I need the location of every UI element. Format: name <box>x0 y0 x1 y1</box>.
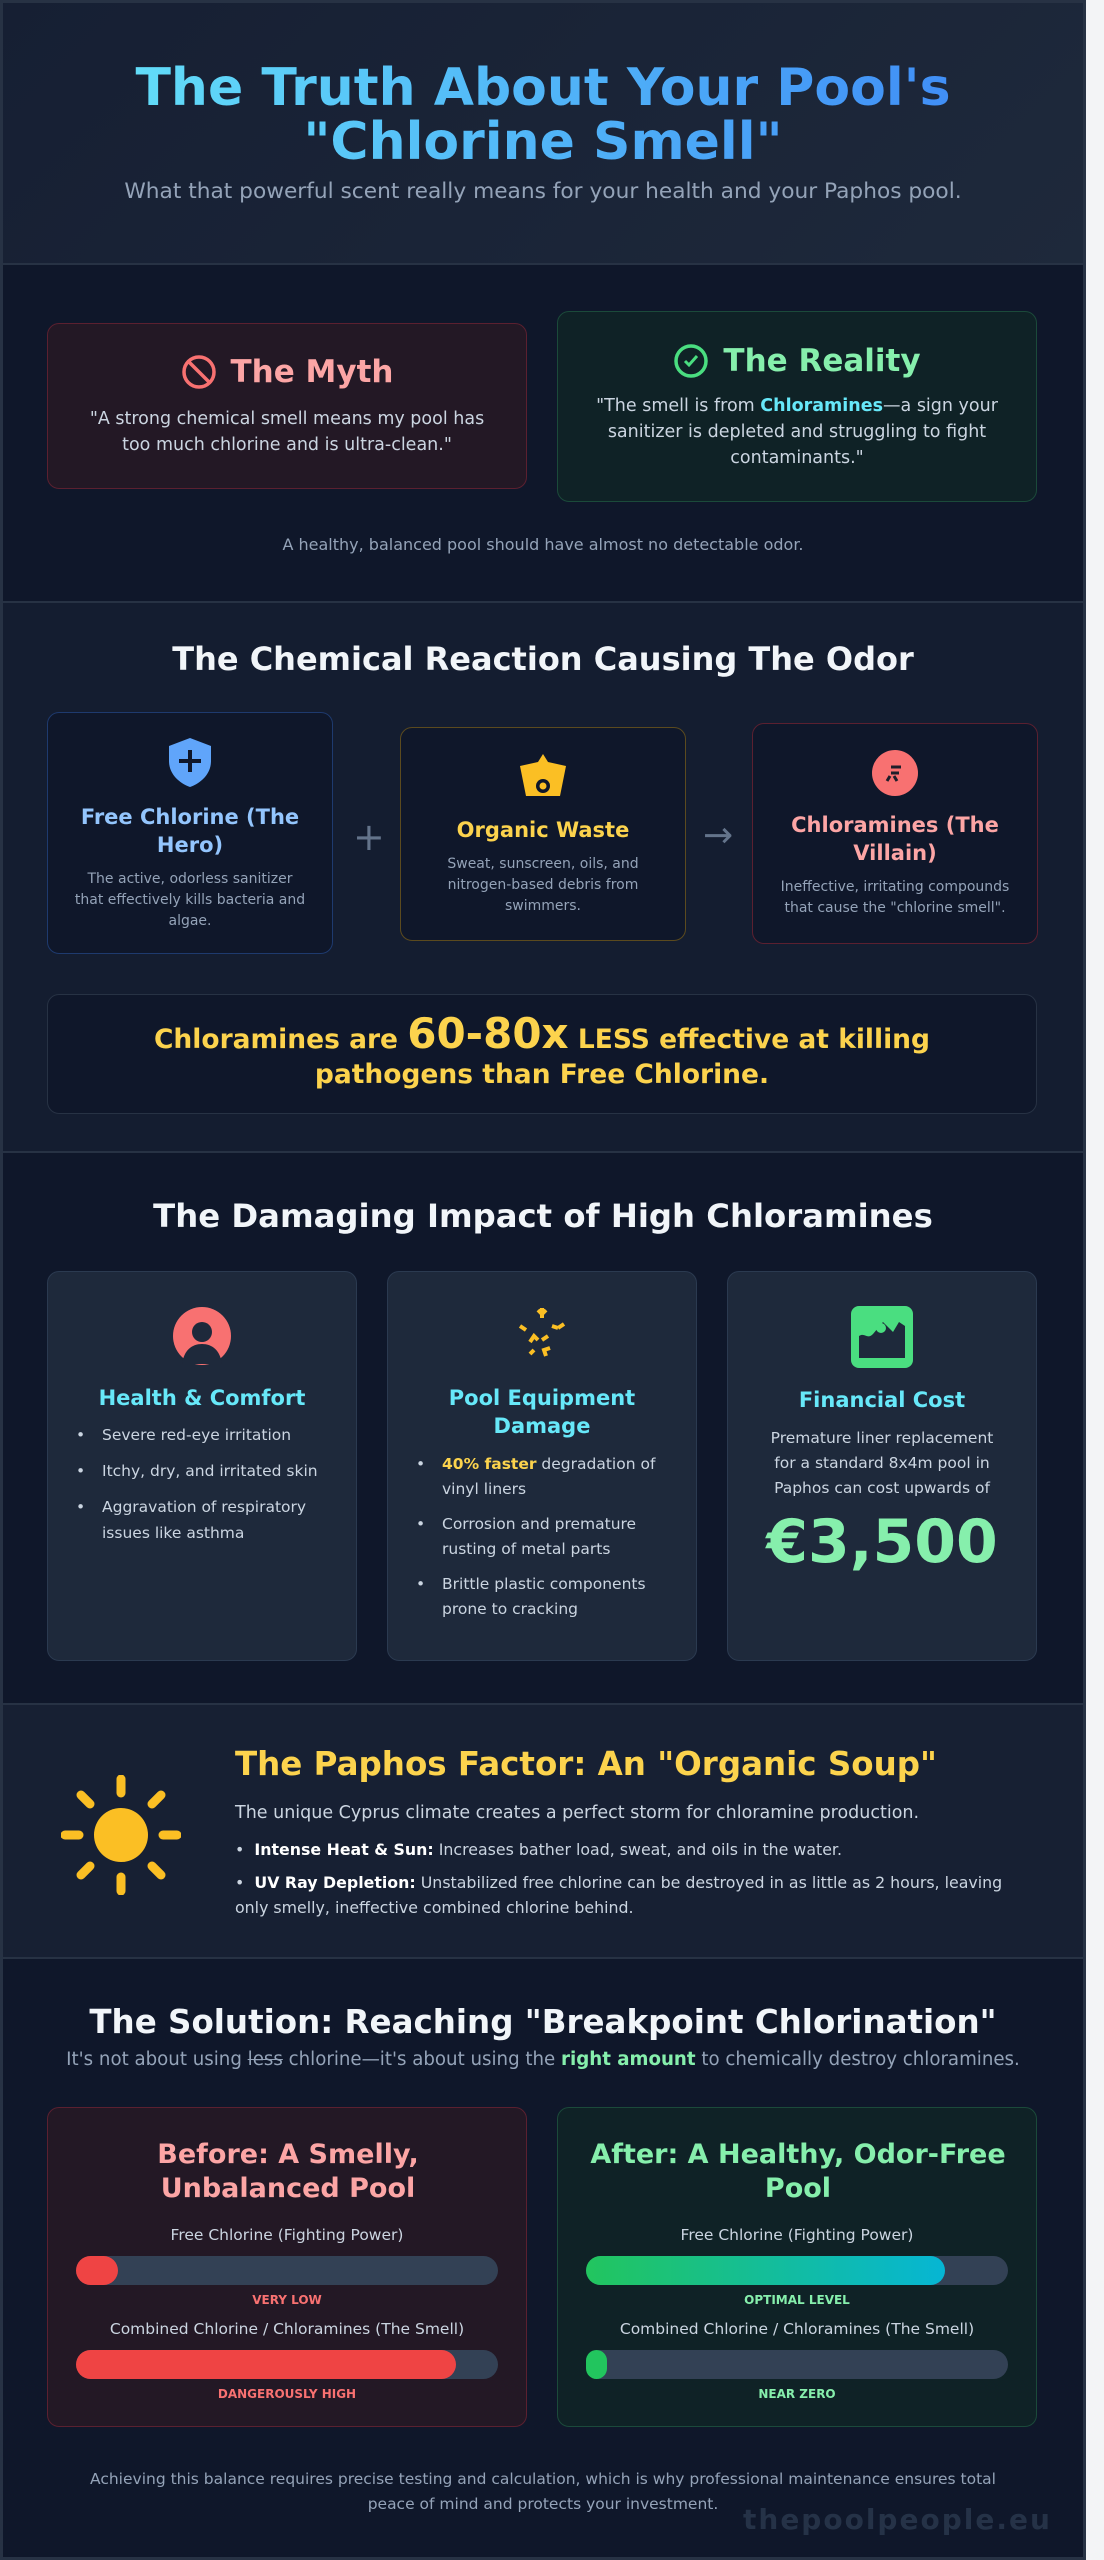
myth text: "A strong chemical smell means my pool has <box>90 409 484 429</box>
bar: free chlorine low: VERY LOW <box>252 2293 322 2307</box>
card: health: Itchy, dry, and irritated skin <box>102 1462 318 1480</box>
card: health <box>47 1271 357 1661</box>
card: financial: Paphos can cost upwards of <box>774 1479 990 1497</box>
callout: 60-80x: pathogens than Free Chlorine. <box>315 1059 769 1090</box>
bar: free chlorine low: Free Chlorine (Fighting Power) <box>171 2226 403 2244</box>
card: financial: Financial Cost <box>799 1388 965 1412</box>
myth heading: The Myth <box>230 354 393 390</box>
card: chloramines: that cause the "chlorine smell". <box>784 900 1006 916</box>
icon: shield <box>169 738 211 787</box>
heading: The Chemical Reaction Causing The Odor <box>172 640 914 678</box>
bar: free chlorine low <box>76 2226 498 2307</box>
text block: Paphos factor: • Intense Heat & Sun: Increases bather load, sweat, and oils in the water. <box>235 1840 842 1859</box>
text block: Paphos factor: The Paphos Factor: An "Organic Soup" <box>235 1745 937 1783</box>
card: financial: for a standard 8x4m pool in <box>774 1454 990 1472</box>
section: damaging impact <box>3 1153 1083 1705</box>
card: free chlorine: algae. <box>168 912 212 928</box>
reality text: sanitizer is depleted and struggling to fight <box>608 422 986 442</box>
card: free chlorine: Hero) <box>157 832 223 856</box>
icon: plus: + <box>353 815 385 859</box>
bar: free chlorine optimal: OPTIMAL LEVEL <box>744 2293 850 2307</box>
card: chloramines: Ineffective, irritating compounds <box>781 878 1009 894</box>
panel: after: After: A Healthy, Odor-Free <box>590 2139 1006 2170</box>
bar: chloramines high <box>76 2320 498 2401</box>
footer text <box>90 2470 996 2513</box>
myth text: too much chlorine and is ultra-clean." <box>122 435 452 455</box>
card: equipment: Damage <box>494 1414 590 1438</box>
reality text <box>596 396 998 468</box>
card: free chlorine: that effectively kills bacteria and <box>75 892 305 908</box>
bar: chloramines near zero <box>586 2320 1008 2401</box>
card: organic waste <box>400 727 686 941</box>
footer text: Achieving this balance requires precise testing and calculation, which is why professional maintenance ensures total <box>90 2470 996 2488</box>
card: health: Severe red-eye irritation <box>102 1426 291 1444</box>
card: equipment: Pool Equipment <box>449 1386 635 1410</box>
heading: The Solution: Reaching "Breakpoint Chlorination" <box>89 2003 997 2041</box>
card: organic waste: Sweat, sunscreen, oils, and <box>447 856 639 872</box>
card: equipment <box>387 1271 697 1661</box>
panel: before: Unbalanced Pool <box>161 2173 415 2204</box>
section: solution <box>3 1959 1083 2560</box>
icon: sun <box>61 1775 181 1895</box>
text block: Paphos factor <box>234 1745 1002 1917</box>
icon: villain <box>872 750 918 796</box>
bar: chloramines high: Combined Chlorine / Chloramines (The Smell) <box>110 2320 464 2338</box>
panel: after <box>557 2107 1037 2427</box>
card: organic waste: nitrogen-based debris from <box>448 876 638 892</box>
card: chloramines: Villain) <box>853 840 937 864</box>
icon: person <box>173 1307 231 1365</box>
section: Paphos factor <box>3 1705 1083 1959</box>
callout: 60-80x: Chloramines are 60-80x LESS effective at killing <box>154 1009 930 1058</box>
card: free chlorine: Free Chlorine (The <box>81 804 299 828</box>
title: The Truth About Your Pool's <box>135 58 951 118</box>
panel: reality <box>557 311 1037 502</box>
text block: Paphos factor: • UV Ray Depletion: Unstabilized free chlorine can be destroyed in as little as 2 hours, leaving only smelly, ineffective combined chlorine behind. <box>235 1873 1002 1917</box>
icon: image/money <box>851 1306 913 1368</box>
heading: The Damaging Impact of High Chloramines <box>153 1197 933 1235</box>
panel: after: Pool <box>765 2173 831 2204</box>
bar: chloramines near zero: NEAR ZERO <box>758 2387 836 2401</box>
card: health: Aggravation of respiratory issues like asthma <box>102 1498 306 1542</box>
bar: chloramines near zero: Combined Chlorine / Chloramines (The Smell) <box>620 2320 974 2338</box>
card: equipment: Brittle plastic components prone to cracking <box>442 1575 646 1618</box>
title: "Chlorine Smell" <box>303 112 783 172</box>
card: financial: Premature liner replacement <box>771 1429 993 1447</box>
reality text: "The smell is from Chloramines—a sign your <box>596 396 998 416</box>
subtitle: What that powerful scent really means for your health and your Paphos pool. <box>124 179 962 204</box>
callout: 60-80x <box>47 994 1037 1114</box>
panel: before <box>47 2107 527 2427</box>
card: chloramines <box>752 723 1038 944</box>
panel: before: Before: A Smelly, <box>157 2139 419 2170</box>
bar: free chlorine optimal <box>586 2226 1008 2307</box>
panel: myth <box>47 323 527 489</box>
card: organic waste: Organic Waste <box>457 818 629 842</box>
footnote: A healthy, balanced pool should have almost no detectable odor. <box>282 535 804 554</box>
card: organic waste: swimmers. <box>505 898 581 914</box>
card: health: Health & Comfort <box>99 1386 305 1410</box>
myth text <box>90 409 484 455</box>
text block: Paphos factor: The unique Cyprus climate creates a perfect storm for chloramine production. <box>235 1803 919 1823</box>
section: chemical reaction <box>3 603 1083 1153</box>
title <box>3 61 1083 169</box>
card: financial: €3,500 <box>766 1507 998 1577</box>
icon: arrow: → <box>703 815 733 856</box>
bar: free chlorine optimal: Free Chlorine (Fighting Power) <box>681 2226 913 2244</box>
card: chloramines: Chloramines (The <box>791 812 999 836</box>
card: free chlorine <box>47 712 333 954</box>
reality text: contaminants." <box>730 448 864 468</box>
icon: broken parts <box>518 1308 566 1357</box>
footer text: peace of mind and protects your investment. <box>368 2495 718 2513</box>
subheading: It's not about using less chlorine—it's about using the right amount to chemically destroy chloramines. <box>66 2049 1020 2070</box>
card: financial <box>727 1271 1037 1661</box>
icon: waste <box>520 754 566 796</box>
watermark: thepoolpeople.eu <box>743 2503 1052 2536</box>
card: equipment: 40% faster degradation of vinyl liners <box>442 1455 655 1498</box>
reality heading: The Reality <box>723 342 921 378</box>
section: myth vs reality <box>3 265 1083 603</box>
bar: chloramines high: DANGEROUSLY HIGH <box>218 2387 356 2401</box>
card: free chlorine: The active, odorless sanitizer <box>88 870 292 886</box>
header section <box>3 3 1083 265</box>
card: equipment: Corrosion and premature rusting of metal parts <box>442 1515 636 1558</box>
